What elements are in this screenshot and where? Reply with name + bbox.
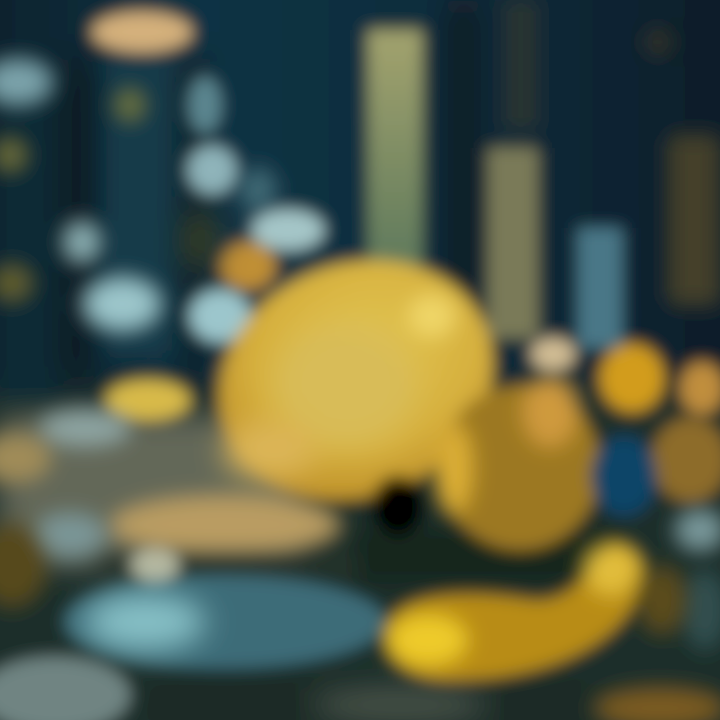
gold coins right — [437, 338, 720, 650]
blue gem — [591, 436, 657, 516]
gold bowl — [385, 544, 720, 720]
pile of flat coins lower left — [0, 380, 360, 607]
large gold coin — [183, 220, 529, 540]
blue dish — [0, 576, 590, 720]
chart columns in the background — [368, 0, 720, 348]
lower background band — [0, 385, 720, 720]
left stack of coins — [0, 12, 324, 400]
shadow beneath coins — [360, 530, 620, 580]
dark coin hole — [372, 476, 424, 536]
